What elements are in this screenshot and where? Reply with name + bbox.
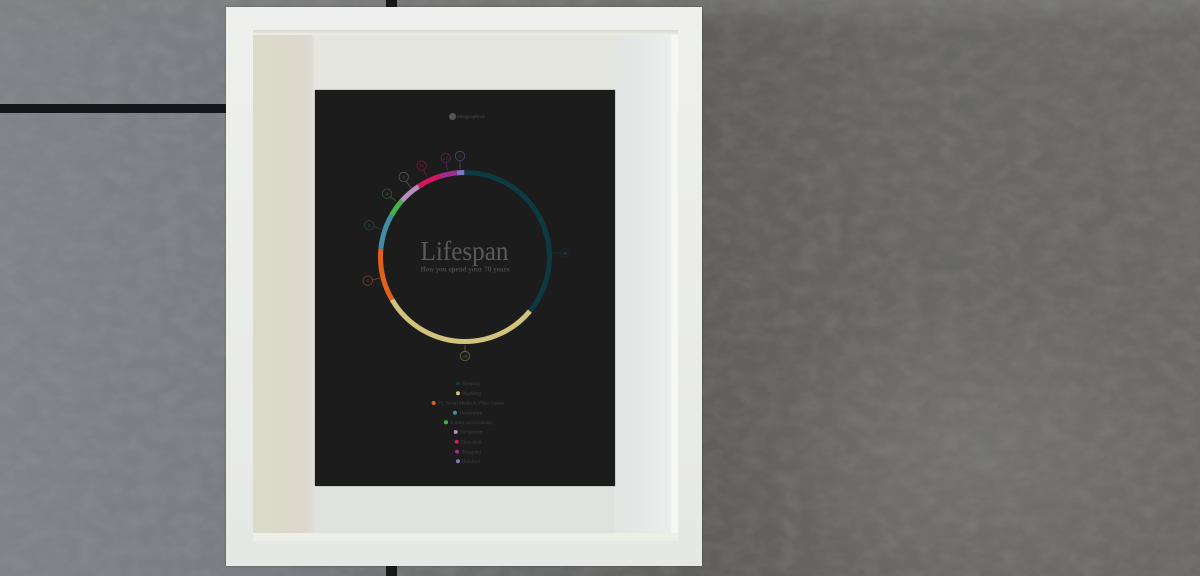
callout: eating 4 (382, 189, 396, 201)
frame opening (253, 30, 678, 541)
callout: working 24: 24 (463, 354, 468, 358)
mat board (253, 35, 678, 533)
callout: sleeping 26 (552, 248, 570, 258)
callout: socialising 2 (399, 172, 411, 188)
right bright edge (671, 34, 678, 537)
subtitle: How you spend your 70 years (420, 266, 510, 274)
title: Lifespan (420, 235, 509, 266)
ring segments (380, 172, 550, 342)
callout: shopping 2.5: 2.5 (443, 156, 449, 160)
bottom edge (253, 533, 678, 541)
callout: tv 6: 6 (366, 278, 369, 283)
callout: sleeping 26: 26 (563, 250, 568, 256)
legend: eating: Eating and Drinking (450, 420, 492, 426)
callout: housework 3: 3 (368, 223, 371, 228)
callout: housework 3 (365, 221, 381, 230)
left inner wall (253, 35, 315, 533)
legend: working: Working (462, 391, 481, 397)
callout: working 24 (460, 345, 470, 361)
legend: holidays: Holidays (462, 459, 481, 465)
legend (432, 381, 505, 465)
callout: socialising 2: 2 (402, 174, 405, 180)
picture frame (226, 7, 702, 566)
legend: tv: TV, Social Media & Video Games (438, 401, 505, 407)
callout: holidays 1 (455, 151, 465, 169)
legend: housework: Housework (460, 410, 483, 416)
callout: eating 4: 4 (386, 191, 389, 196)
legend: shopping: Shopping (462, 449, 481, 455)
callout: shopping 2.5 (441, 153, 450, 170)
callout: tv 6 (363, 276, 380, 285)
poster (315, 90, 615, 486)
logo mark (449, 113, 456, 120)
top edge (253, 30, 678, 35)
right inner wall (615, 35, 671, 533)
callout: holidays 1: 1 (459, 154, 461, 158)
legend: education: Education (461, 440, 482, 446)
legend: socialising: Socialising (460, 430, 483, 436)
callout: education 10: 10 (419, 163, 425, 168)
logo text: infographica (457, 114, 485, 119)
callout: education 10 (417, 161, 427, 177)
legend: sleeping: Sleeping (462, 381, 480, 387)
logo (449, 113, 485, 120)
